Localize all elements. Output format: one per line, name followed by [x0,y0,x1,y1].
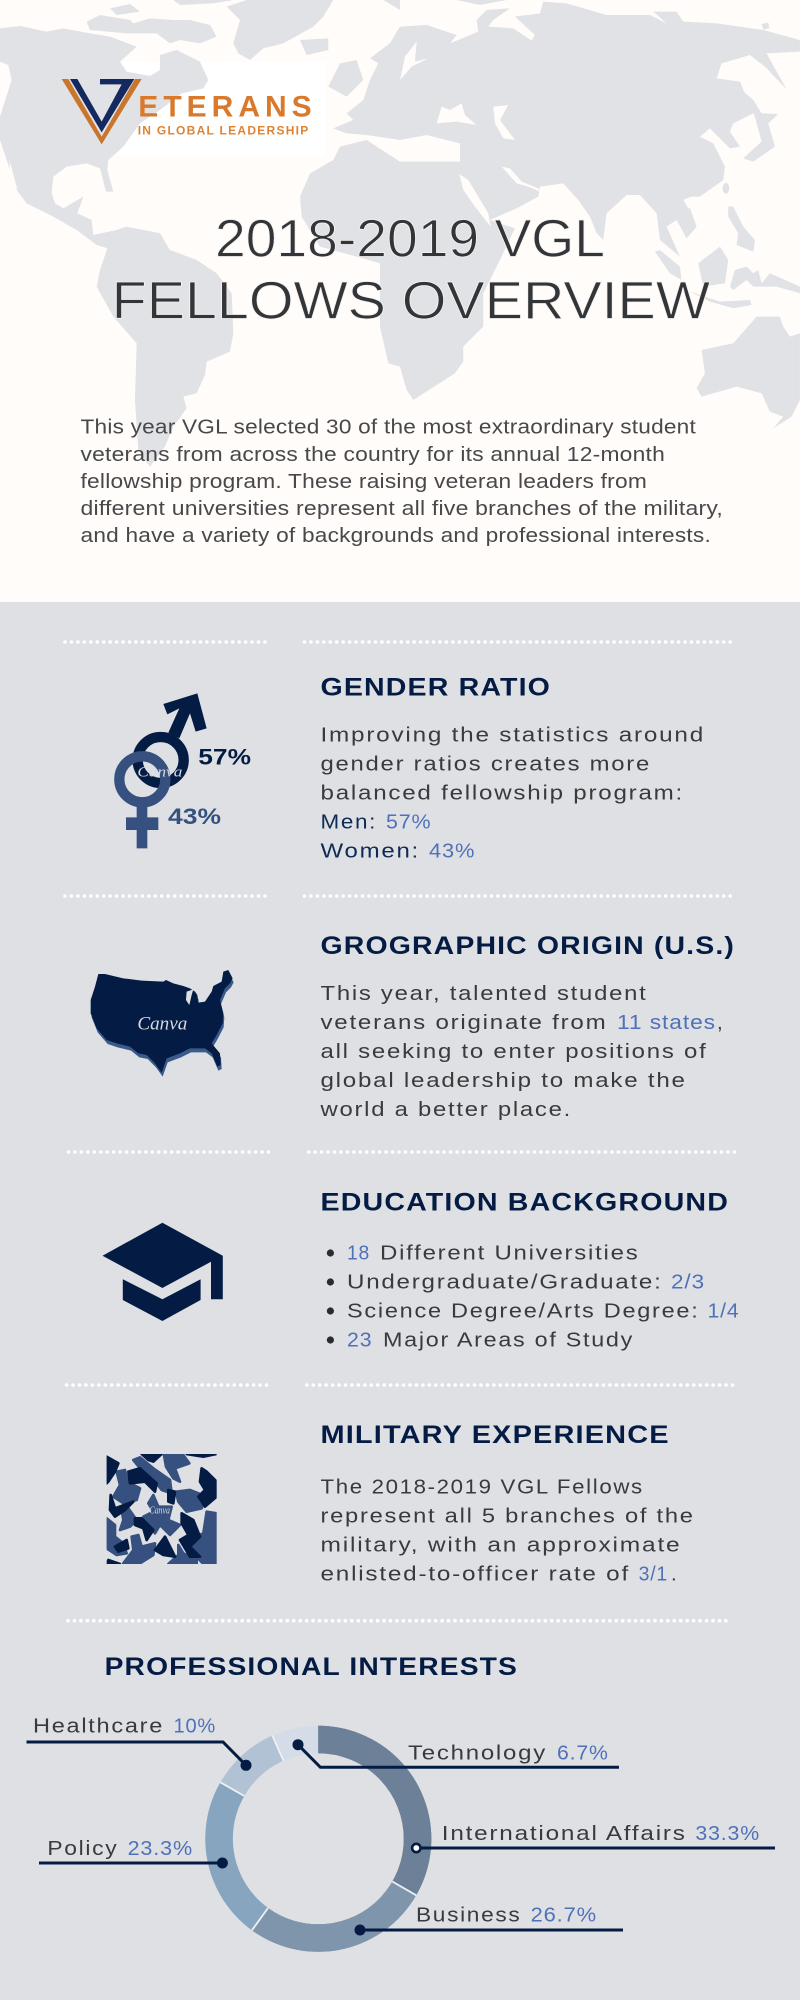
icon: camouflage pattern: Canva [149,1505,170,1516]
panel: education background [102,1189,740,1351]
icon: gender symbols: Canva [137,765,182,781]
text: gender ratio body: 57% [386,811,431,834]
text: geographic origin body: world a better place. [319,1098,572,1121]
callout: policy: 23.3% [128,1837,193,1860]
list: education facts [327,1241,740,1351]
icon: gender symbols [119,693,207,848]
text: geographic origin body: veterans originate from [320,1011,607,1034]
callout: international affairs: International Affairs [442,1822,687,1845]
intro text: veterans from across the country for its annual 12-month [80,444,665,466]
intro text: fellowship program. These raising veteran leaders from [80,471,647,493]
heading: education background: EDUCATION BACKGROUND [320,1189,729,1217]
text: military experience body [320,1475,695,1586]
text: gender ratio body: gender ratios creates more [320,753,651,776]
callout: healthcare: 10% [174,1715,216,1738]
intro text: This year VGL selected 30 of the most extraordinary student [80,417,696,439]
text: gender ratio body: Women: [320,840,420,863]
list: education facts: 1/4 [708,1299,740,1322]
callout: technology [292,1739,619,1767]
list: education facts: Major Areas of Study [383,1328,634,1351]
text: geographic origin body: 11 states [617,1011,716,1034]
panel: statistics background [0,602,800,2000]
panel: gender ratio [119,674,705,863]
list: education facts: Undergraduate/Graduate: [347,1270,663,1293]
panel: military experience [107,1421,695,1586]
callout: business: Business [416,1904,521,1927]
title [112,210,710,330]
donut chart [219,1740,418,1938]
callout: policy [39,1837,228,1868]
callout: healthcare: Healthcare [33,1715,164,1738]
text: geographic origin body: global leadership to make the [320,1069,687,1092]
icon: map of the United States [91,970,234,1077]
logo mark [62,79,142,144]
list: education facts: Science Degree/Arts Degree: [347,1299,700,1322]
icon: map of the United States: Canva [137,1013,187,1034]
text: geographic origin body: This year, talented student [320,982,648,1005]
list: education facts: Different Universities [380,1241,640,1264]
text: military experience body: 3/1 [639,1563,668,1586]
callout: technology: Technology [408,1741,547,1764]
intro text: and have a variety of backgrounds and professional interests. [80,525,711,547]
logo wordmark: ETERANS [138,91,312,124]
callout: healthcare [26,1715,252,1771]
heading: geographic origin: GROGRAPHIC ORIGIN (U.S.) [320,932,735,960]
list: education facts: 23 [347,1328,372,1351]
list: education facts: 18 [347,1241,370,1264]
callout: international affairs: 33.3% [695,1822,760,1845]
panel: geographic origin [91,932,735,1121]
stat: women 43%: 43% [168,804,221,829]
icon: camouflage pattern [107,1454,217,1564]
text: military experience body: enlisted-to-officer rate of [320,1563,630,1586]
text: gender ratio body: Improving the statistics around [320,724,705,747]
panel: professional interests [26,1653,775,1938]
callout: technology: 6.7% [557,1741,609,1764]
heading: professional interests: PROFESSIONAL INTERESTS [105,1653,518,1681]
stat: men 57%: 57% [198,744,251,769]
heading: military experience: MILITARY EXPERIENCE [320,1421,670,1449]
text: gender ratio body: balanced fellowship program: [320,782,684,805]
callout: international affairs [412,1822,775,1852]
logo background [52,62,325,156]
intro text [80,417,723,547]
callout: business: 26.7% [531,1904,597,1927]
callout: business [354,1904,623,1936]
text: military experience body: . [671,1563,678,1586]
text: geographic origin body: all seeking to enter positions of [320,1040,708,1063]
title: 2018-2019 VGL [215,210,605,269]
list: education facts: 2/3 [671,1270,705,1293]
text: gender ratio body: Men: [320,811,377,834]
panel: header background [0,0,800,602]
text: gender ratio body: 43% [429,840,475,863]
logo tagline: IN GLOBAL LEADERSHIP [138,123,308,137]
callout: policy: Policy [47,1837,118,1860]
heading: gender ratio: GENDER RATIO [320,674,551,702]
text: military experience body: military, with an approximate [320,1533,682,1556]
world map background [0,0,800,467]
logo [62,79,312,144]
intro text: different universities represent all five branches of the military, [80,498,723,520]
text: geographic origin body: , [717,1011,724,1034]
title: FELLOWS OVERVIEW [112,271,710,330]
text: military experience body: represent all 5 branches of the [320,1504,695,1527]
text: geographic origin body [319,982,724,1121]
text: gender ratio body [320,724,705,863]
icon: graduation cap [102,1223,223,1321]
text: military experience body: The 2018-2019 VGL Fellows [320,1475,644,1498]
